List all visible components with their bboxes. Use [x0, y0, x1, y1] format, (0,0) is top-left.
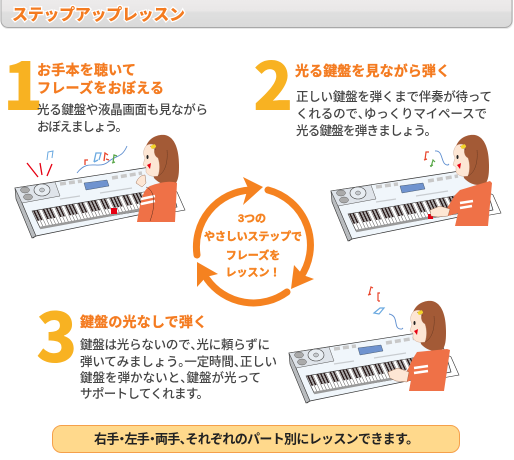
- girl body: [137, 182, 177, 222]
- wave: [389, 314, 403, 329]
- step 2 body text: 正しい鍵盤を弾くまで伴奏が待って: [296, 89, 492, 104]
- hands: [388, 368, 409, 382]
- step 3 body text: サポートしてくれます。: [80, 387, 209, 401]
- step 1 body text: おぼえましょう。: [37, 120, 128, 134]
- melody notes: [85, 153, 117, 165]
- step 3 body text: [80, 337, 277, 401]
- step 2 number: 2: [253, 34, 293, 130]
- step 3 body text: 鍵盤を弾かないと、鍵盤が光って: [80, 370, 261, 385]
- hand: [136, 175, 146, 187]
- step 1 body text: [37, 102, 208, 134]
- cycle label: [204, 213, 302, 279]
- title bar: [1, 0, 513, 29]
- cycle label: やさしいステップで: [204, 230, 302, 243]
- step 3 number: 3: [36, 283, 77, 382]
- step 3 heading: 鍵盤の光なしで弾く: [80, 314, 207, 330]
- blue note: [47, 151, 53, 160]
- girl body: [405, 349, 450, 391]
- step 2 body text: 光る鍵盤を弾きましょう。: [296, 123, 437, 138]
- illustration: step 2 keyboard and girl: [331, 135, 501, 241]
- illustration: step 1 keyboard and girl: [15, 135, 185, 238]
- cycle label: フレーズを: [226, 248, 280, 262]
- cycle diagram: [196, 177, 314, 303]
- step 2 body text: くれるので、ゆっくりマイペースで: [296, 107, 487, 121]
- illustration: step 3 keyboard and girl: [289, 287, 459, 403]
- step 1 body text: 光る鍵盤や液晶画面も見ながら: [37, 102, 208, 117]
- light rays: [27, 163, 52, 177]
- step 2 heading: 光る鍵盤を見ながら弾く: [295, 63, 450, 79]
- red key: [111, 208, 117, 214]
- notes: [424, 152, 435, 167]
- step 1 heading: お手本を聴いて: [37, 62, 136, 78]
- step 1 number: 1: [3, 34, 43, 130]
- girl body: [446, 181, 492, 226]
- red key: [428, 214, 433, 219]
- step 1 heading: [37, 62, 164, 96]
- cycle label: レッスン！: [226, 267, 280, 279]
- callout: 右手・左手・両手、それぞれのパート別にレッスンできます。: [94, 432, 419, 446]
- step 2 body text: [296, 89, 492, 138]
- callout: [52, 426, 460, 452]
- melody wave: [77, 146, 127, 173]
- arrow: to step 1: [197, 262, 287, 303]
- arrow: to step 2: [196, 177, 263, 255]
- wave: [435, 151, 449, 165]
- title: ステップアップレッスン: [12, 5, 185, 24]
- notes: [368, 287, 384, 314]
- step 3 body text: 弾いてみましょう。一定時間、正しい: [80, 354, 277, 369]
- cycle label: 3つの: [238, 213, 266, 225]
- hands: [430, 206, 450, 217]
- step 1 heading: フレーズをおぼえる: [37, 80, 164, 96]
- arrow: to step 3: [268, 190, 314, 289]
- step 3 body text: 鍵盤は光らないので、光に頼らずに: [80, 337, 270, 352]
